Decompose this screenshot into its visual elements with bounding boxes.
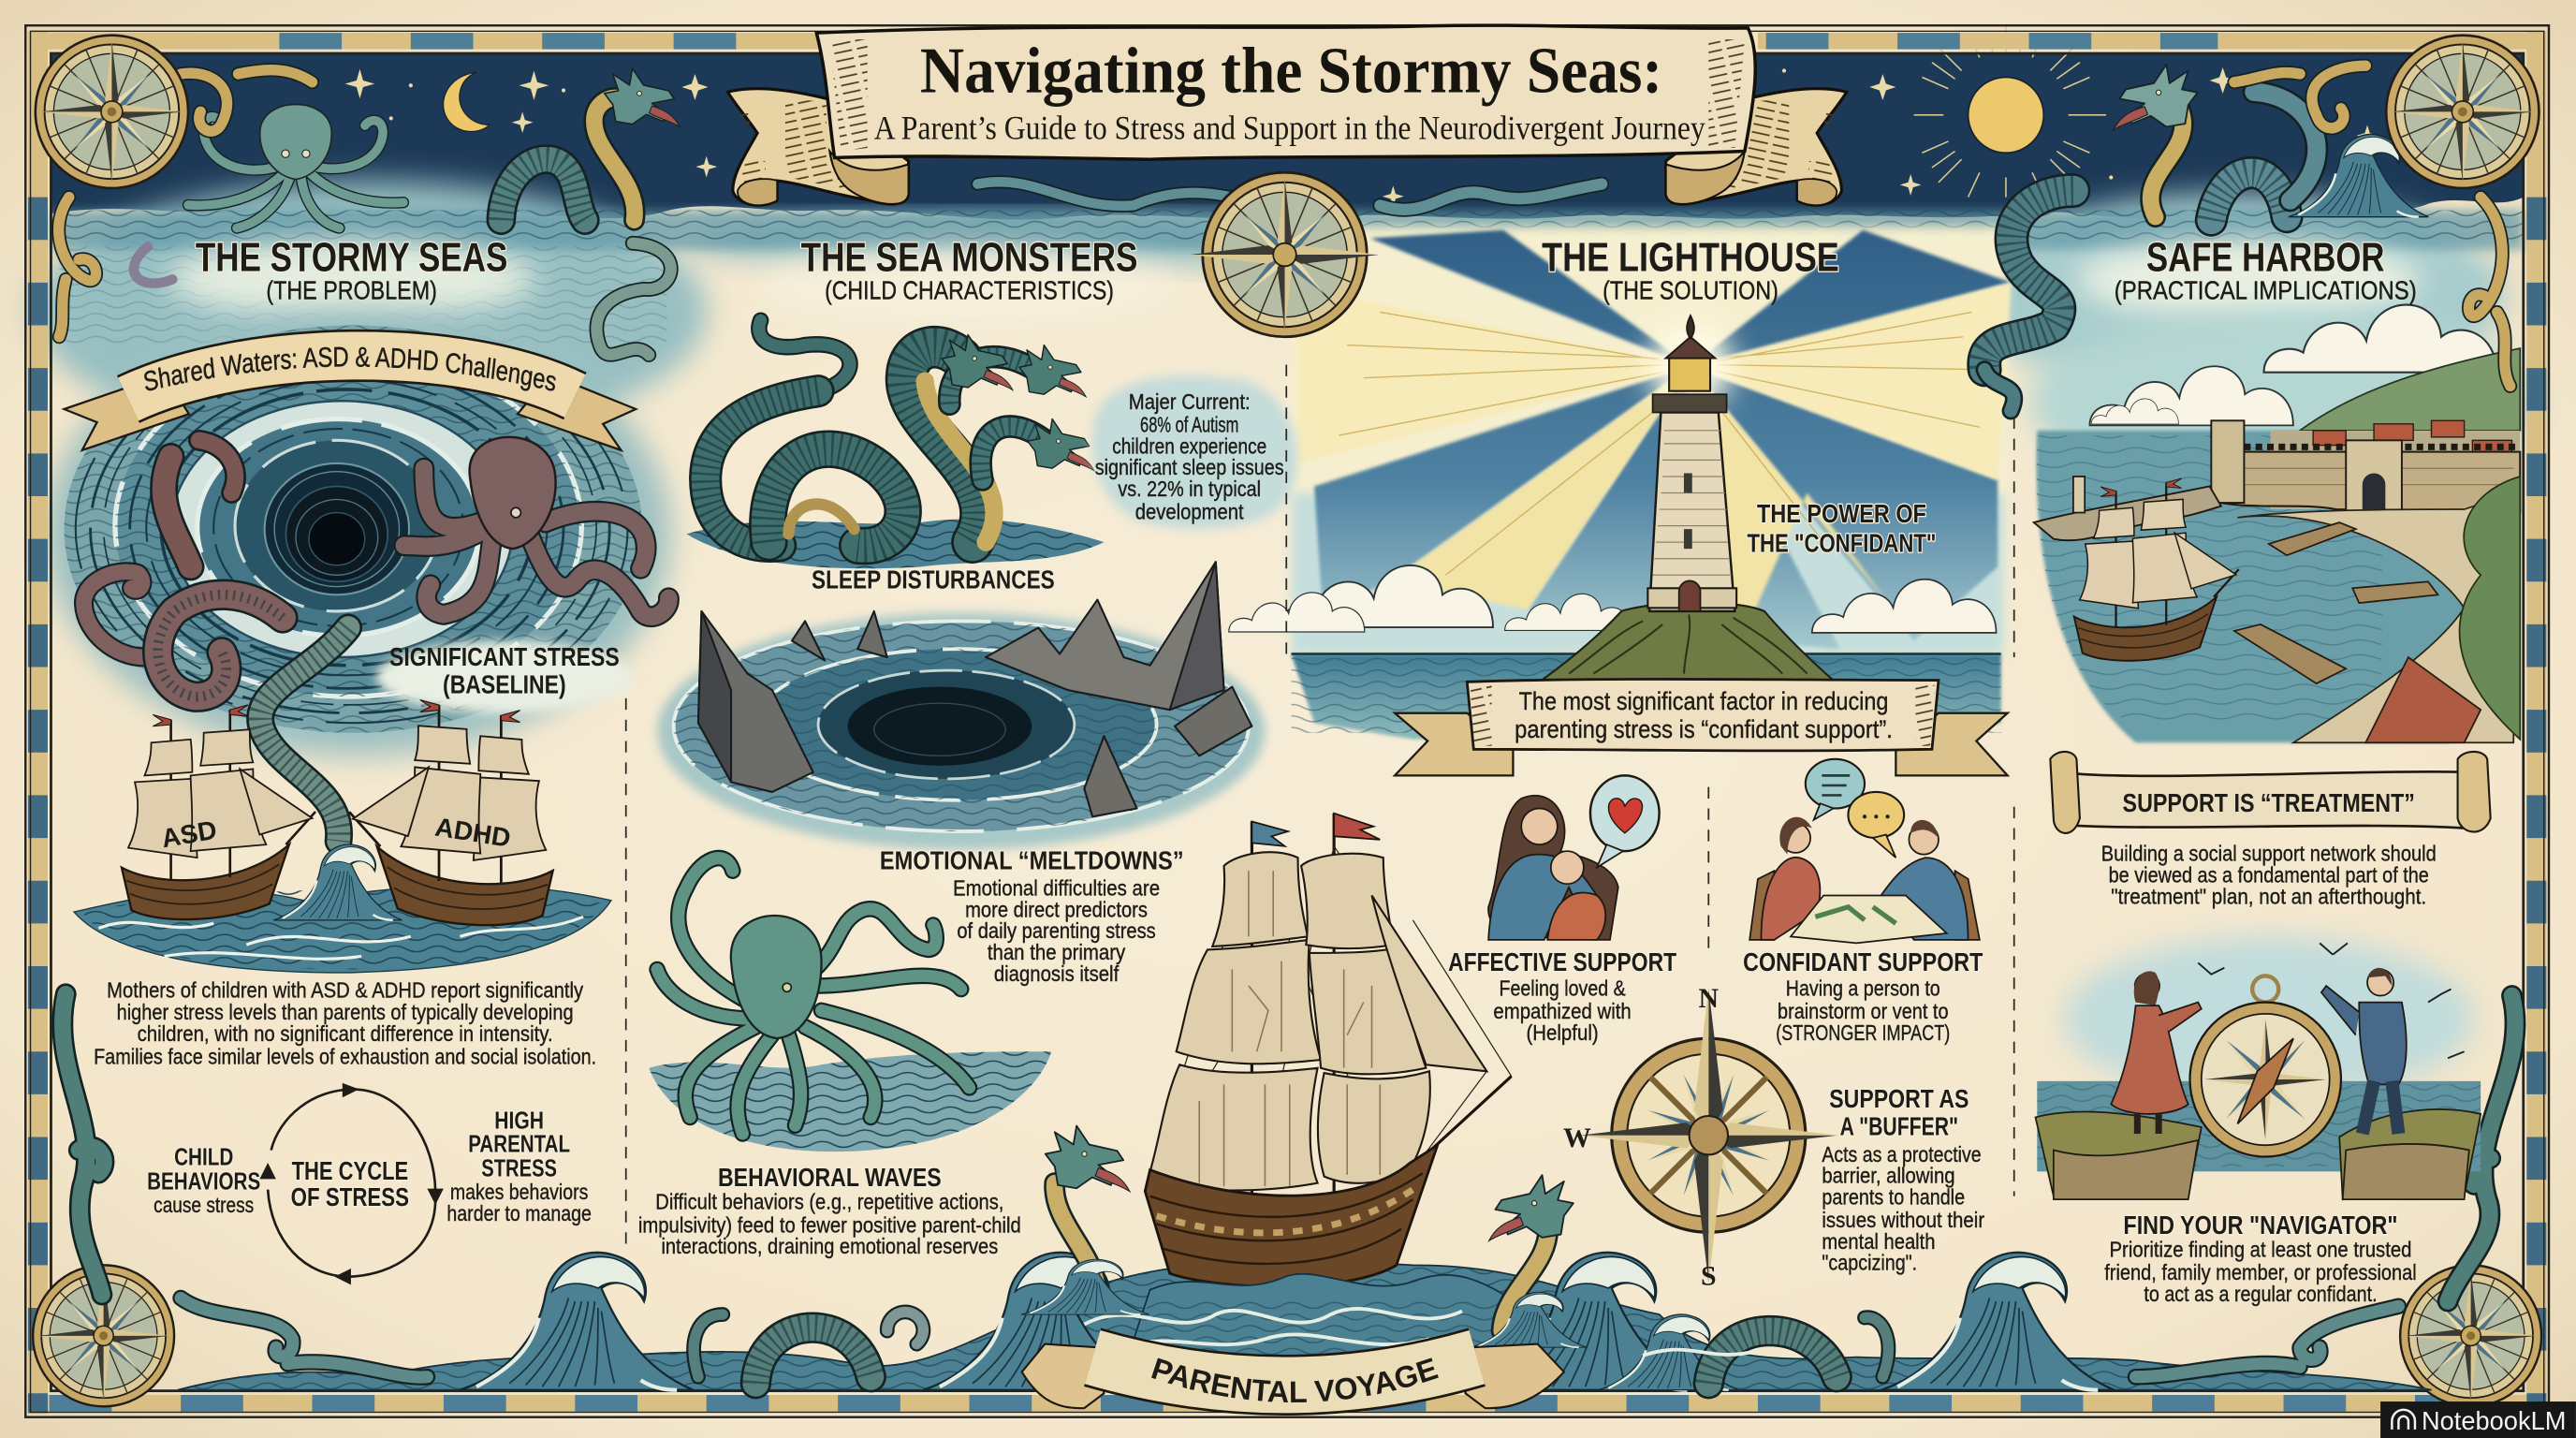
chart: cycle of stress: OF STRESS — [291, 1182, 409, 1211]
section heading: stormy seas — [196, 235, 507, 304]
text: affective support — [1448, 947, 1676, 1045]
title: Navigating the Stormy Seas: — [920, 34, 1662, 107]
icon: main galleon — [1145, 814, 1512, 1286]
label: power of the confidant: THE POWER OF — [1757, 499, 1926, 528]
house — [2365, 657, 2481, 742]
icon: left small serpent — [134, 243, 671, 355]
icon: right sky dragon — [2114, 65, 2428, 220]
text: emotional meltdowns: than the primary — [988, 940, 1125, 964]
icon: man — [2321, 968, 2407, 1134]
icon: rocky whirlpool — [657, 562, 1265, 849]
text: emotional meltdowns — [880, 845, 1184, 986]
text: find your navigator: Prioritize finding at least one trusted — [2110, 1238, 2411, 1262]
text: behavioral waves: Difficult behaviors (e.g., repetitive actions, — [655, 1190, 1003, 1214]
callout: sleep statistic — [1091, 375, 1297, 529]
icon: corner ornaments — [59, 66, 2510, 386]
icon: bottom dragons near ship — [1021, 1126, 1587, 1347]
panel: whirlpool — [46, 312, 670, 842]
banner: shared waters: Shared Waters: ASD & ADHD Challenges — [144, 346, 556, 391]
text: affective support: empathized with — [1493, 999, 1632, 1023]
subtitle: A Parent’s Guide to Stress and Support in the Neurodivergent Journey — [874, 109, 1705, 146]
text: treatment body: Building a social support network should — [2101, 842, 2437, 866]
icon: woman — [2111, 971, 2202, 1134]
text: find your navigator: FIND YOUR "NAVIGATOR" — [2123, 1211, 2398, 1240]
text: confidant support: brainstorm or vent to — [1778, 999, 1949, 1023]
chart: cycle of stress: CHILD — [174, 1144, 233, 1170]
icon: sea around ship — [1084, 1274, 1758, 1390]
label: power of the confidant: THE "CONFIDANT" — [1748, 529, 1936, 558]
banner: confidant support: parenting stress is “confidant support”. — [1515, 714, 1893, 743]
stars — [212, 67, 2378, 207]
text: emotional meltdowns: diagnosis itself — [994, 961, 1120, 986]
icon: sun — [1914, 26, 2106, 198]
icon: ASD and ADHD ships: ASD — [159, 815, 219, 853]
label: significant stress: (BASELINE) — [443, 670, 566, 699]
section heading: sea monsters: (CHILD CHARACTERISTICS) — [825, 275, 1114, 304]
icon: ASD and ADHD ships — [74, 700, 611, 973]
text: support as a buffer: A "BUFFER" — [1840, 1112, 1958, 1141]
text: support as a buffer: "capcizing". — [1822, 1251, 1917, 1275]
icon: frame tentacles — [63, 994, 2515, 1301]
section heading: safe harbor: (PRACTICAL IMPLICATIONS) — [2115, 275, 2417, 304]
badge: NotebookLM: NotebookLM — [2422, 1406, 2566, 1435]
text: support as a buffer: Acts as a protective — [1822, 1142, 1982, 1167]
banner: support is treatment: SUPPORT IS “TREATMENT” — [2123, 788, 2415, 817]
panel: harbor scene — [2029, 305, 2539, 742]
text: support as a buffer — [1822, 1084, 1984, 1275]
panel: sky band — [51, 26, 2524, 220]
land — [2237, 493, 2513, 742]
icon: buffer compass rose: S — [1701, 1260, 1717, 1291]
text: stress finding — [94, 977, 596, 1068]
text: find your navigator: friend, family member, or professional — [2104, 1260, 2417, 1284]
section heading: lighthouse — [1542, 235, 1839, 304]
icon: right large serpent — [1984, 191, 2073, 411]
icon: brown kraken — [404, 437, 668, 617]
chart: cycle of stress: THE CYCLE — [292, 1156, 408, 1185]
banner: title scroll — [728, 25, 1847, 205]
icon: thin serpent under title — [977, 182, 1602, 210]
section heading: stormy seas: THE STORMY SEAS — [196, 235, 507, 281]
text: support as a buffer: barrier, allowing — [1822, 1164, 1955, 1188]
text: support as a buffer: SUPPORT AS — [1829, 1084, 1969, 1113]
text: behavioral waves: BEHAVIORAL WAVES — [718, 1163, 942, 1192]
chart: cycle of stress: BEHAVIORS — [147, 1169, 260, 1196]
label: significant stress: SIGNIFICANT STRESS — [389, 642, 620, 671]
icon: compass top right — [2386, 36, 2539, 188]
icon: navigator scene — [2036, 936, 2481, 1199]
icon: bottom serpents — [181, 1298, 2398, 1384]
text: confidant support: CONFIDANT SUPPORT — [1743, 947, 1983, 976]
text: confidant support — [1743, 947, 1983, 1045]
section heading: safe harbor — [2115, 235, 2417, 304]
icon: buffer compass rose — [1563, 983, 1837, 1291]
text: stress finding: Mothers of children with ASD & ADHD report significantly — [107, 977, 583, 1002]
banner: confidant support: The most significant factor in reducing — [1519, 686, 1888, 715]
icon: compass bottom left — [33, 1265, 174, 1406]
section heading: lighthouse: THE LIGHTHOUSE — [1542, 235, 1839, 281]
text: confidant support: (STRONGER IMPACT) — [1776, 1020, 1950, 1045]
text: emotional meltdowns: more direct predictors — [965, 897, 1148, 921]
section heading: sea monsters — [801, 235, 1137, 304]
chart: cycle of stress: makes behaviors — [450, 1180, 588, 1204]
text: emotional meltdowns: of daily parenting stress — [957, 918, 1156, 943]
text: stress finding: Families face similar levels of exhaustion and social isolation. — [94, 1044, 596, 1068]
text: find your navigator: to act as a regular confidant. — [2144, 1282, 2378, 1306]
breakwater — [2034, 486, 2221, 540]
section heading: stormy seas: (THE PROBLEM) — [266, 275, 437, 304]
label: power of the confidant — [1748, 499, 1936, 558]
chart: cycle of stress: cause stress — [154, 1193, 254, 1217]
chart: cycle of stress: PARENTAL — [468, 1131, 570, 1157]
text: emotional meltdowns: EMOTIONAL “MELTDOWNS” — [880, 845, 1184, 874]
panel: the lighthouse scene — [1229, 227, 2011, 740]
badge: NotebookLM — [2380, 1401, 2576, 1438]
icon: left tentacles — [84, 440, 283, 697]
icon: ASD and ADHD ships: ADHD — [433, 813, 513, 853]
text: behavioral waves: impulsivity) feed to fewer positive parent-child — [638, 1212, 1021, 1237]
text: support as a buffer: parents to handle — [1822, 1184, 1965, 1209]
section heading: lighthouse: (THE SOLUTION) — [1603, 275, 1778, 304]
icon: birds — [2198, 943, 2465, 1058]
text: affective support: Feeling loved & — [1500, 976, 1626, 1001]
text: emotional meltdowns: Emotional difficulties are — [953, 875, 1160, 900]
callout: sleep statistic: children experience — [1112, 433, 1266, 458]
text: behavioral waves: interactions, draining emotional reserves — [661, 1234, 998, 1258]
text: affective support: AFFECTIVE SUPPORT — [1448, 947, 1676, 976]
chart: cycle of stress: HIGH — [494, 1108, 544, 1135]
icon: buffer compass rose: N — [1699, 983, 1720, 1014]
callout: sleep statistic: significant sleep issues — [1095, 455, 1284, 479]
swirl strokes — [76, 335, 627, 723]
icon: lighthouse — [1540, 315, 1835, 682]
label: sleep disturbances: SLEEP DISTURBANCES — [812, 565, 1055, 594]
text: behavioral waves — [638, 1163, 1021, 1258]
icon: green serpent tail — [260, 627, 348, 842]
text: treatment body: be viewed as a fondamental part of the — [2109, 862, 2429, 887]
text: stress finding: higher stress levels than parents of typically developing — [117, 1000, 574, 1024]
chart: cycle of stress: harder to manage — [446, 1201, 592, 1225]
icon: centre compass — [1191, 172, 1379, 337]
banner: support is treatment — [2050, 752, 2491, 833]
icon: confidant support table — [1749, 759, 1980, 943]
banner: confidant support — [1395, 679, 2008, 775]
text: confidant support: Having a person to — [1786, 976, 1940, 1001]
icon: buffer compass rose: W — [1563, 1123, 1591, 1153]
icon: sky kraken left — [188, 104, 403, 228]
callout: sleep statistic: development — [1135, 500, 1244, 524]
panel: bottom waves — [178, 1253, 2431, 1390]
icon: compass top left — [36, 36, 188, 188]
icon: big compass — [2190, 976, 2341, 1157]
text: support as a buffer: issues without their — [1822, 1208, 1984, 1232]
text: support as a buffer: mental health — [1822, 1229, 1935, 1254]
chart: cycle of stress: STRESS — [481, 1156, 557, 1182]
panel: water under sky — [33, 181, 2524, 444]
icon: hydra sleep disturbances — [687, 320, 1104, 568]
callout: sleep statistic: vs. 22% in typical — [1118, 477, 1261, 501]
icon: left sky dragon — [501, 68, 680, 220]
fort — [2211, 420, 2520, 513]
text: affective support: (Helpful) — [1526, 1020, 1599, 1045]
text: stress finding: children, with no significant difference in intensity. — [138, 1021, 553, 1046]
banner: parental voyage: PARENTAL VOYAGE — [1151, 1357, 1439, 1402]
text: treatment body: "treatment" plan, not an afterthought. — [2111, 884, 2426, 908]
banner: parental voyage — [1020, 1328, 1565, 1416]
icon: compass bottom right — [2400, 1265, 2541, 1406]
icon: green octopus — [649, 858, 1051, 1152]
banner: shared waters — [61, 330, 638, 453]
label: significant stress — [376, 640, 633, 713]
clouds — [1229, 565, 1997, 633]
callout: sleep statistic: Majer Current: — [1129, 389, 1251, 414]
icon: affective support hug — [1488, 775, 1660, 940]
text: treatment body — [2101, 842, 2437, 908]
section heading: safe harbor: SAFE HARBOR — [2146, 235, 2384, 281]
icon: crescent moon — [443, 72, 490, 132]
section heading: sea monsters: THE SEA MONSTERS — [801, 235, 1137, 281]
callout: sleep statistic: 68% of Autism — [1140, 413, 1238, 437]
text: find your navigator — [2104, 1211, 2417, 1306]
chart: cycle of stress — [147, 1084, 592, 1284]
dashed column dividers — [626, 365, 2014, 1249]
icon: harbor ship — [2074, 478, 2239, 661]
docks — [2234, 522, 2438, 683]
